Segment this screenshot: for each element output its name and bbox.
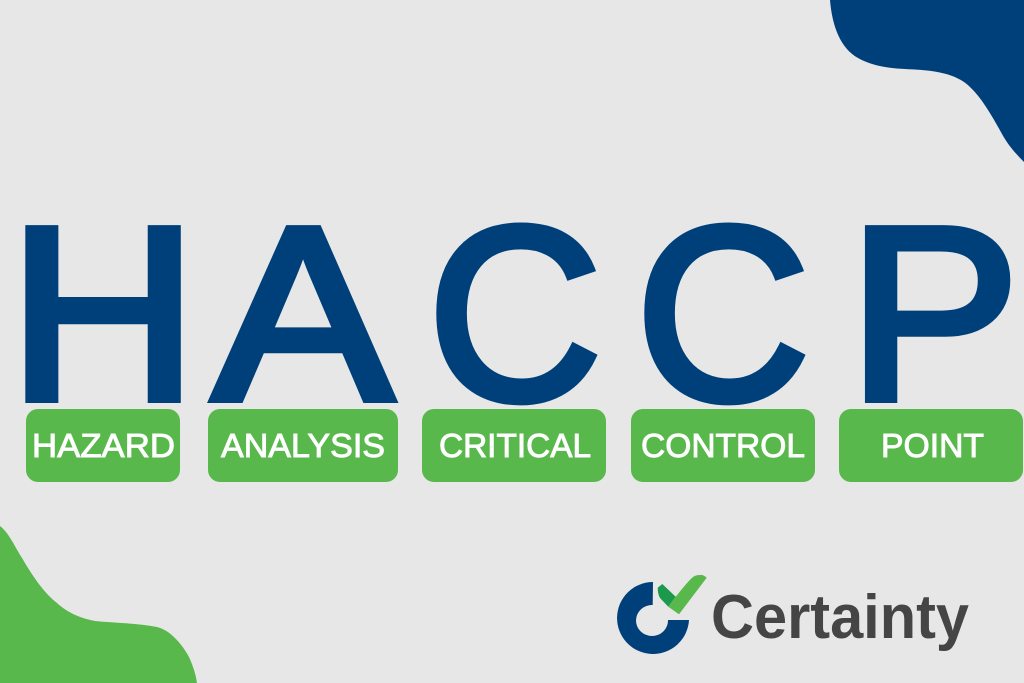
title: HACCP: C	[428, 175, 602, 452]
label: point	[839, 409, 1023, 482]
label: hazard	[26, 409, 180, 482]
icon: ring with check	[617, 575, 707, 654]
title: HACCP: A	[213, 175, 394, 452]
green corner blob	[0, 526, 197, 683]
label: analysis: ANALYSIS	[221, 427, 385, 464]
logo: Certainty	[617, 575, 969, 654]
label: point: POINT	[881, 427, 984, 464]
label: control	[631, 409, 815, 482]
label: analysis	[208, 409, 398, 482]
label: hazard: HAZARD	[32, 427, 175, 464]
wordmark: Certainty	[711, 583, 969, 652]
title: HACCP: H	[8, 176, 198, 452]
title: HACCP: P	[848, 177, 1020, 452]
title: HACCP: C	[636, 175, 810, 452]
title: HACCP	[8, 175, 1020, 452]
navy corner blob	[830, 0, 1024, 162]
label: critical: CRITICAL	[439, 427, 591, 464]
label: control: CONTROL	[641, 427, 805, 464]
label: critical	[422, 409, 606, 482]
